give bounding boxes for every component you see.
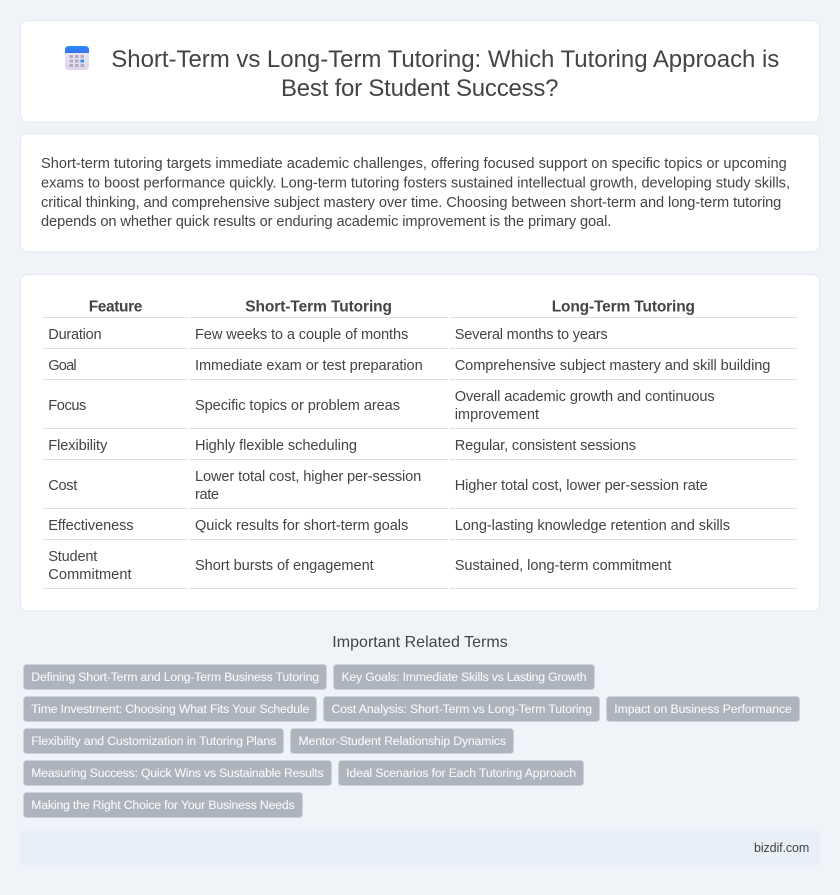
row: cost: Lower total cost, higher per-session — [195, 469, 421, 485]
title: Short-Term vs Long-Term Tutoring: Which Tutoring Approach is — [111, 46, 779, 73]
row: effectiveness — [48, 518, 730, 534]
table header: Short-Term Tutoring — [245, 299, 392, 316]
table header — [89, 299, 695, 316]
row: focus: Focus — [48, 398, 86, 414]
chip: Measuring Success: Quick Wins vs Sustainable Results — [31, 766, 324, 780]
row: duration: Few weeks to a couple of months — [195, 327, 408, 343]
chip: Making the Right Choice for Your Business Needs — [31, 798, 295, 812]
row: student commitment: Short bursts of engagement — [195, 558, 374, 574]
row: student commitment: Student — [48, 549, 97, 565]
row: goal — [48, 358, 770, 374]
chip — [24, 664, 326, 690]
title — [111, 46, 779, 102]
row: goal: Comprehensive subject mastery and skill building — [455, 358, 770, 374]
row: cost — [48, 469, 708, 503]
chip: Impact on Business Performance — [614, 702, 792, 716]
chip: Ideal Scenarios for Each Tutoring Approach — [346, 766, 576, 780]
row: goal: Immediate exam or test preparation — [195, 358, 423, 374]
row: duration: Several months to years — [455, 327, 608, 343]
row: focus: improvement — [455, 407, 539, 423]
row: duration — [48, 327, 608, 343]
text block: introduction paragraph — [41, 156, 790, 230]
chip — [338, 760, 584, 786]
row: cost: rate — [195, 487, 219, 503]
row: focus: Overall academic growth and continuous — [455, 389, 715, 405]
chip — [334, 664, 594, 690]
row: student commitment — [48, 549, 671, 583]
chip — [324, 696, 600, 722]
text block: introduction paragraph: Short-term tutoring targets immediate academic challenges, offering focused support on specific topics or upcoming — [41, 156, 787, 172]
footer: bizdif.com — [754, 841, 809, 855]
chip: Defining Short-Term and Long-Term Business Tutoring — [31, 670, 319, 684]
chip — [24, 696, 316, 722]
row: cost: Cost — [48, 478, 77, 494]
chip — [290, 728, 514, 754]
panel: related term chips — [24, 664, 800, 818]
panel: comparison table — [20, 274, 820, 611]
row: flexibility: Flexibility — [48, 438, 108, 454]
footer — [20, 831, 820, 865]
chip: Time Investment: Choosing What Fits Your Schedule — [31, 702, 310, 716]
row: flexibility: Regular, consistent sessions — [455, 438, 636, 454]
row: cost: Higher total cost, lower per-session rate — [455, 478, 708, 494]
chip: Cost Analysis: Short-Term vs Long-Term Tutoring — [332, 702, 592, 716]
chip — [24, 760, 332, 786]
chip — [606, 696, 800, 722]
chip: Flexibility and Customization in Tutoring Plans — [31, 734, 276, 748]
panel: introduction — [20, 134, 820, 252]
chip: Mentor-Student Relationship Dynamics — [298, 734, 506, 748]
row: focus: Specific topics or problem areas — [195, 398, 400, 414]
row: goal: Goal — [48, 358, 77, 374]
row: flexibility: Highly flexible scheduling — [195, 438, 357, 454]
row: duration: Duration — [48, 327, 102, 343]
row: effectiveness: Effectiveness — [48, 518, 134, 534]
panel: title card — [20, 20, 820, 122]
chip — [24, 728, 284, 754]
icon: calendar — [65, 46, 89, 70]
row: focus — [48, 389, 715, 423]
table header: Long-Term Tutoring — [552, 299, 695, 316]
chip — [24, 792, 302, 818]
title: Best for Student Success? — [281, 75, 558, 102]
row: effectiveness: Long-lasting knowledge retention and skills — [455, 518, 730, 534]
heading: important related terms: Important Related Terms — [332, 634, 508, 651]
chip: Key Goals: Immediate Skills vs Lasting Growth — [342, 670, 586, 684]
row: student commitment: Sustained, long-term commitment — [455, 558, 671, 574]
text block: introduction paragraph: critical thinking, and comprehensive subject mastery over time. Choosing between short-term and long-term tutoring — [41, 195, 781, 211]
row: flexibility — [48, 438, 636, 454]
text block: introduction paragraph: depends on whether quick results or enduring academic improvement is the primary goal. — [41, 214, 611, 230]
row: effectiveness: Quick results for short-term goals — [195, 518, 408, 534]
row: student commitment: Commitment — [48, 567, 132, 583]
text block: introduction paragraph: exams to boost performance quickly. Long-term tutoring fosters sustained intellectual growth, developing study skills, — [41, 175, 790, 191]
table header: Feature — [89, 299, 143, 316]
